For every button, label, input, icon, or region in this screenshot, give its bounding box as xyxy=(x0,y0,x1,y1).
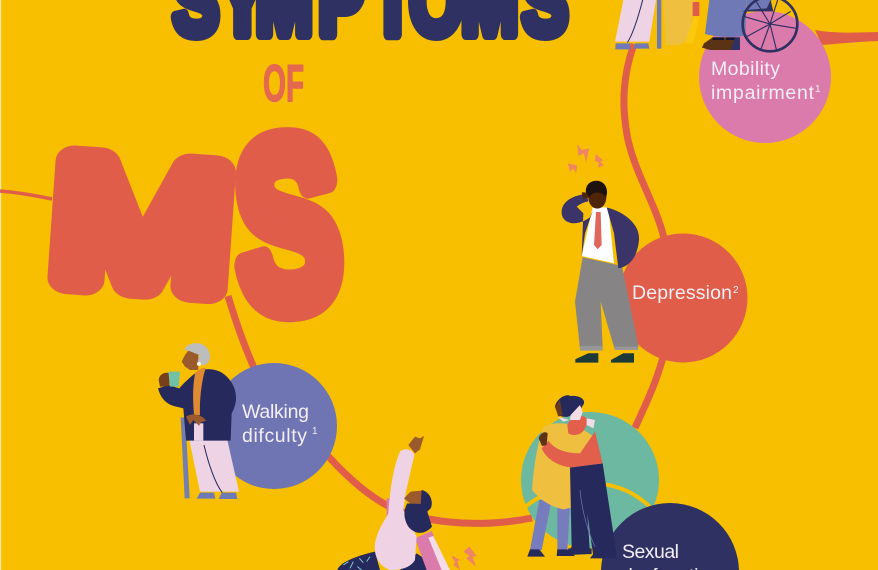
woman's shoes xyxy=(527,549,575,557)
figure: couple hugging xyxy=(527,395,617,558)
letter S: S xyxy=(230,91,346,360)
hair xyxy=(185,343,210,365)
hand xyxy=(186,414,206,426)
figure: older woman with cane and mug xyxy=(158,343,239,499)
label: 1 xyxy=(312,426,318,437)
head xyxy=(588,186,606,209)
trousers xyxy=(575,257,639,349)
panel: mobility impairment xyxy=(699,11,831,143)
head xyxy=(182,351,198,370)
waist strip xyxy=(194,423,203,441)
figure: woman stretching xyxy=(337,436,477,570)
label: Depression xyxy=(632,282,732,304)
subtitle: OF: OF xyxy=(263,55,304,113)
label: Mobility xyxy=(711,58,780,80)
circle xyxy=(699,11,831,143)
hair xyxy=(555,395,584,417)
label: impairment xyxy=(711,82,815,104)
man's trousers xyxy=(567,463,617,557)
skin xyxy=(557,405,595,428)
dark circle xyxy=(601,503,739,570)
panel: depression xyxy=(618,234,748,362)
label: Walking xyxy=(242,401,309,423)
cane xyxy=(657,0,661,49)
pink vest xyxy=(387,498,392,517)
mug xyxy=(168,372,180,387)
label: 1 xyxy=(815,84,821,95)
heading: MS xyxy=(47,91,346,360)
helper body xyxy=(663,0,695,45)
lightning bolts xyxy=(451,547,477,570)
teal circle xyxy=(521,412,659,548)
circle xyxy=(618,234,748,362)
trousers xyxy=(189,440,239,492)
shoes xyxy=(615,43,649,49)
shoes xyxy=(575,353,634,363)
lightning bolts xyxy=(568,144,604,173)
hand xyxy=(539,432,548,446)
panel: sexual dysfunction xyxy=(521,412,739,570)
letter M: M xyxy=(47,124,236,326)
jacket xyxy=(158,369,236,441)
trousers xyxy=(615,0,656,42)
scarf xyxy=(193,368,206,415)
tie xyxy=(594,212,602,249)
woman's legs xyxy=(530,500,570,550)
hand xyxy=(408,436,424,453)
shoes xyxy=(702,37,740,50)
label: Sexual xyxy=(622,541,679,563)
panel: walking difficulty xyxy=(211,363,337,489)
woman's coat xyxy=(532,423,595,509)
man's collar xyxy=(567,416,587,435)
torso and arm xyxy=(375,449,417,570)
yellow band xyxy=(524,484,650,508)
man's shoes xyxy=(567,548,617,558)
patterned trousers xyxy=(337,552,434,570)
face xyxy=(404,491,422,505)
seat xyxy=(747,0,772,12)
shoes xyxy=(197,493,237,499)
mug hand xyxy=(159,373,169,387)
skirt xyxy=(705,0,747,37)
label: difculty xyxy=(242,425,307,447)
jacket xyxy=(562,194,639,268)
figure: standing person and wheelchair user, cropped at top xyxy=(615,0,797,51)
label: 2 xyxy=(733,285,739,296)
hijab xyxy=(404,490,432,533)
man's shirt xyxy=(542,432,603,467)
shirt xyxy=(582,207,614,263)
circle xyxy=(211,363,337,489)
wheel xyxy=(743,0,797,51)
figure: man holding his head xyxy=(562,144,639,363)
cane xyxy=(181,417,190,498)
